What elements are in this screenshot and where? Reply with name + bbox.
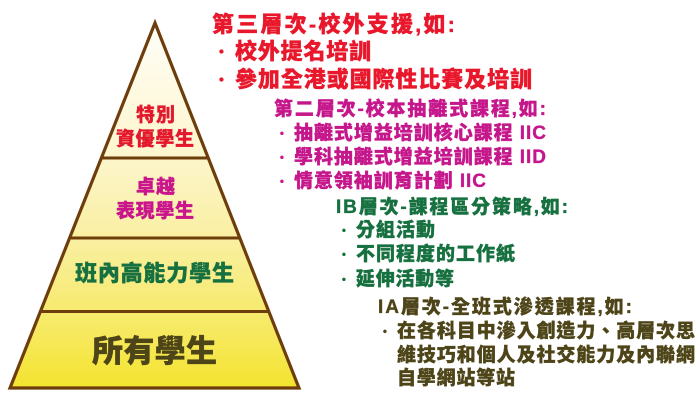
tier label: all students: 所有學生 xyxy=(92,334,217,369)
level two text block: 情意領袖訓育計劃 IIC xyxy=(294,169,486,192)
level IA text block: 自學網站等站 xyxy=(397,366,515,389)
level IB text block: • xyxy=(342,249,346,261)
level three text block: 第三層次-校外支援,如: xyxy=(212,12,455,37)
level IB text block: • xyxy=(342,225,346,237)
level two text block: • xyxy=(280,128,284,140)
level two text block: 學科抽離式增益培訓課程 IID xyxy=(294,145,546,168)
level two text block: • xyxy=(280,176,284,188)
level three text block: 校外提名培訓 xyxy=(235,39,371,64)
level three text block: • xyxy=(219,71,224,87)
tier label: gifted: 資優學生 xyxy=(116,127,194,150)
level two text block xyxy=(274,97,546,192)
level IB text block: • xyxy=(342,274,346,286)
level three text block xyxy=(212,12,532,92)
tier label: gifted xyxy=(116,103,194,150)
level IA text block xyxy=(378,295,695,389)
level two text block: • xyxy=(280,152,284,164)
level three text block: 參加全港或國際性比賽及培訓 xyxy=(235,67,532,92)
level IB text block: 不同程度的工作紙 xyxy=(356,242,515,265)
tier label: outstanding: 卓越 xyxy=(136,175,175,198)
level three text block: • xyxy=(219,43,224,59)
tier label: gifted: 特別 xyxy=(136,103,175,126)
level IA text block: 維技巧和個人及社交能力及內聯網 xyxy=(397,343,695,366)
level two text block: 抽離式增益培訓核心課程 IIC xyxy=(294,121,546,144)
level IB text block: IB層次-課程區分策略,如: xyxy=(336,195,568,218)
level two text block: 第二層次-校本抽離式課程,如: xyxy=(274,97,546,120)
level IB text block: 延伸活動等 xyxy=(356,267,454,290)
level IA text block: IA層次-全班式滲透課程,如: xyxy=(378,295,632,318)
level IB text block: 分組活動 xyxy=(356,218,435,241)
tier label: high ability in class: 班內高能力學生 xyxy=(75,261,234,286)
level IB text block xyxy=(336,195,568,290)
pyramid body xyxy=(10,23,299,388)
level IA text block: • xyxy=(383,326,387,338)
tier label: outstanding: 表現學生 xyxy=(116,199,194,222)
level IA text block: 在各科目中滲入創造力、高層次思 xyxy=(397,319,695,342)
tier label: outstanding xyxy=(116,175,194,222)
pyramid xyxy=(10,23,299,388)
